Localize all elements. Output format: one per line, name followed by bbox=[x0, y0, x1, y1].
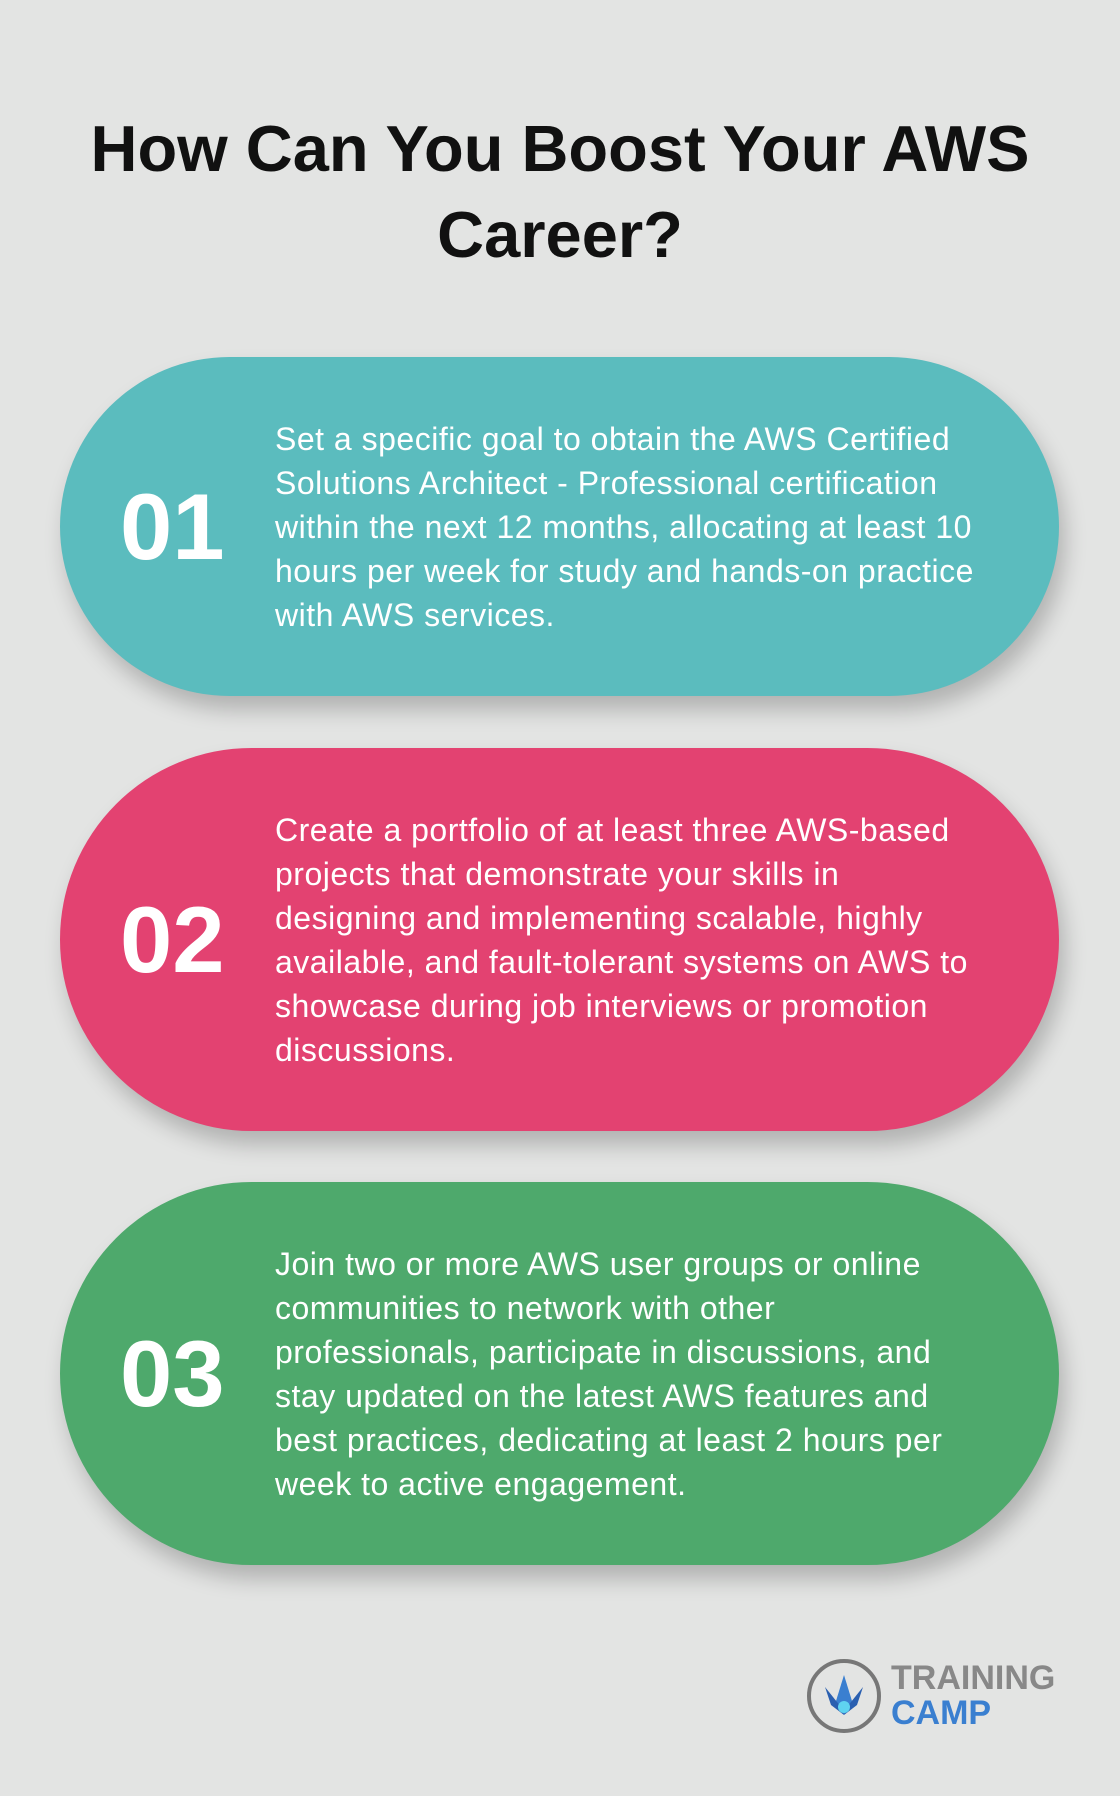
logo text: CAMP bbox=[891, 1694, 991, 1732]
number 01: 01 bbox=[120, 474, 225, 578]
title: Career? bbox=[437, 198, 683, 271]
text 01: Set a specific goal to obtain the AWS Certified bbox=[275, 420, 950, 456]
logo text: TRAINING bbox=[891, 1659, 1055, 1697]
logo text bbox=[891, 1659, 1055, 1732]
logo bbox=[807, 1659, 1055, 1733]
number 03: 03 bbox=[120, 1320, 225, 1426]
text 03: communities to network with other bbox=[275, 1290, 775, 1326]
text 02: Create a portfolio of at least three AWS-based bbox=[275, 812, 950, 848]
text 02: projects that demonstrate your skills in bbox=[275, 856, 839, 892]
panel: step 03 bbox=[60, 1182, 1059, 1565]
text 02: designing and implementing scalable, highly bbox=[275, 900, 923, 936]
title bbox=[91, 112, 1029, 271]
text 03: stay updated on the latest AWS features and bbox=[275, 1378, 929, 1414]
text 03: professionals, participate in discussions, and bbox=[275, 1334, 931, 1370]
text 02: available, and fault-tolerant systems on AWS to bbox=[275, 944, 968, 980]
text 03: Join two or more AWS user groups or online bbox=[275, 1246, 921, 1282]
text 02: discussions. bbox=[275, 1032, 455, 1068]
text 01 bbox=[275, 420, 974, 632]
text 01: Solutions Architect - Professional certification bbox=[275, 464, 938, 500]
text 02 bbox=[275, 812, 968, 1068]
panel: step 01 bbox=[60, 357, 1059, 696]
text 01: within the next 12 months, allocating at least 10 bbox=[275, 508, 972, 544]
icon: logo circle bbox=[807, 1659, 881, 1733]
text 03: week to active engagement. bbox=[275, 1466, 686, 1502]
text 01: hours per week for study and hands-on practice bbox=[275, 552, 974, 588]
text 02: showcase during job interviews or promotion bbox=[275, 988, 928, 1024]
number 02: 02 bbox=[120, 886, 225, 992]
text 01: with AWS services. bbox=[275, 596, 555, 632]
text 03: best practices, dedicating at least 2 hours per bbox=[275, 1422, 942, 1458]
title: How Can You Boost Your AWS bbox=[91, 112, 1029, 185]
panel: step 02 bbox=[60, 748, 1059, 1131]
text 03 bbox=[275, 1246, 942, 1502]
